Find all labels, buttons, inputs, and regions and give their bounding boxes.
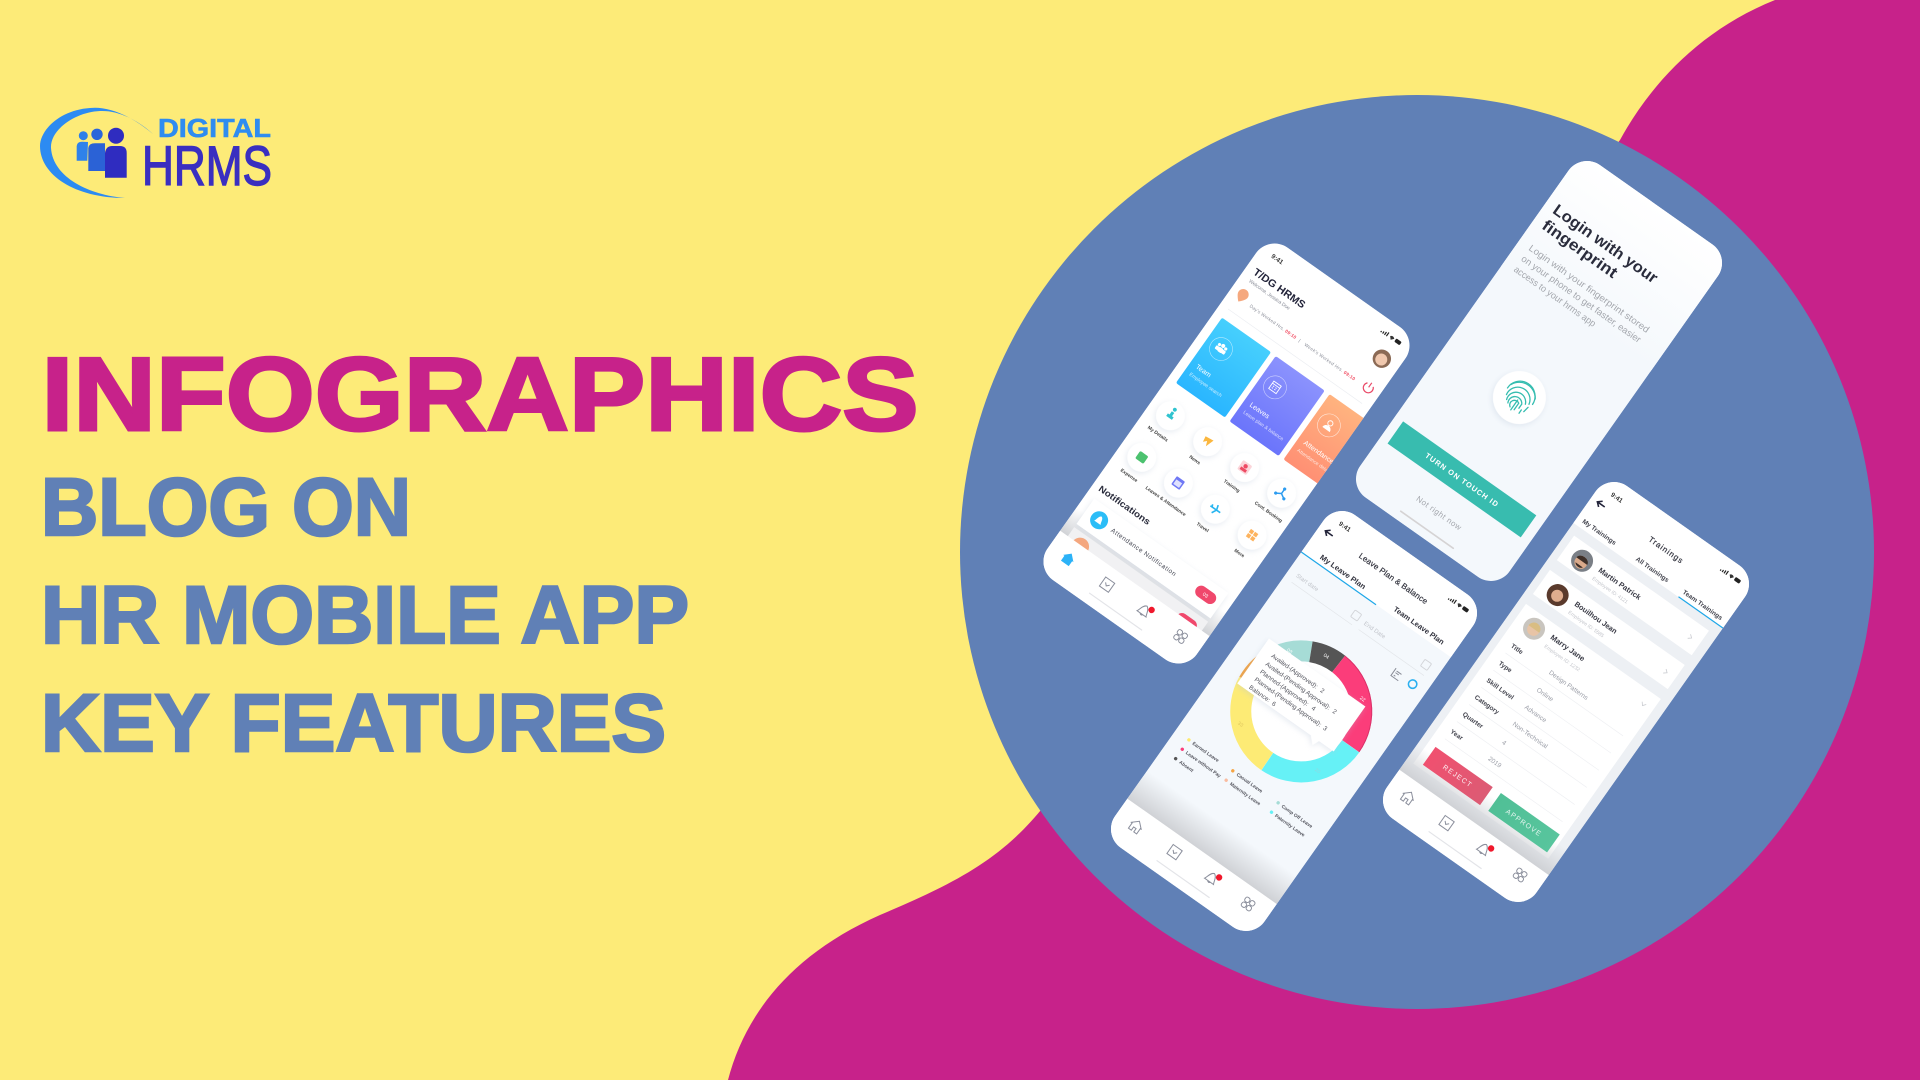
status bar xyxy=(1270,252,1402,349)
headline: INFOGRAPHICS: INFOGRAPHICS xyxy=(42,337,918,453)
app title: T/DG HRMS xyxy=(1251,266,1308,311)
location pin icon xyxy=(1238,289,1249,302)
donut tooltip xyxy=(1233,638,1365,757)
menu: Expense xyxy=(1120,448,1155,482)
donut tooltip: 2 xyxy=(1331,708,1338,716)
donut tooltip: 2 xyxy=(1319,687,1326,695)
screen title: Trainings xyxy=(1647,535,1685,565)
list card: Bouilhou Jean xyxy=(1533,570,1685,689)
bottom nav xyxy=(1044,530,1210,664)
tab: Team Trainings: Team Trainings xyxy=(1681,589,1724,622)
legend: Leave without Pay xyxy=(1184,750,1222,779)
detail form rows: Non-Technical xyxy=(1511,721,1549,751)
card: Leaves: Leave plan & balance xyxy=(1242,410,1285,442)
Turn on Touch ID button: TURN ON TOUCH ID xyxy=(1423,451,1501,509)
date fields: Start date xyxy=(1294,573,1320,594)
login description: on your phone to get faster, easier xyxy=(1519,253,1643,345)
notification shade xyxy=(1060,507,1226,637)
donut chart xyxy=(1230,640,1372,782)
tab: My Leave Plan: My Leave Plan xyxy=(1318,553,1368,591)
APPROVE button xyxy=(1488,793,1560,852)
list card: Bouilhou Jean: Employee ID: 5585 xyxy=(1567,610,1605,639)
tab: Team Leave Plan: Team Leave Plan xyxy=(1392,605,1446,647)
donut tooltip: Planned-(Pending Approval): xyxy=(1253,676,1323,729)
donut tooltip: 3 xyxy=(1321,725,1329,733)
logo people icon xyxy=(77,128,127,178)
notification card: 03 xyxy=(1201,592,1209,600)
detail form rows: 2019 xyxy=(1487,756,1503,770)
detail form rows: Category xyxy=(1473,694,1500,716)
phone: dashboard screen xyxy=(1044,244,1410,664)
chart toggle icons xyxy=(1391,668,1418,691)
donut chart: 22 xyxy=(1358,695,1367,704)
menu: More: More xyxy=(1233,548,1246,560)
legend: Casual Leave xyxy=(1235,772,1264,795)
card: Attendance xyxy=(1284,394,1364,484)
phone: leave plan screen xyxy=(1101,502,1486,941)
legend: Absent xyxy=(1178,760,1195,774)
card: Team: Employee search xyxy=(1188,372,1223,399)
detail form rows: Quarter xyxy=(1461,711,1485,731)
login heading: fingerprint xyxy=(1539,217,1621,282)
home indicator xyxy=(1400,510,1454,549)
menu: Training: Training xyxy=(1222,479,1241,494)
APPROVE button: APPROVE xyxy=(1504,808,1543,839)
donut tooltip: Planned-(Approved): xyxy=(1258,669,1310,708)
menu: More xyxy=(1234,526,1266,558)
menu: Travel xyxy=(1197,500,1228,532)
menu: Expense: Expense xyxy=(1119,468,1139,484)
subheading: BLOG ON: BLOG ON xyxy=(41,462,411,553)
avatar xyxy=(1372,350,1392,368)
detail form rows: Design Patterns xyxy=(1547,669,1590,702)
status bar xyxy=(1609,490,1742,587)
screen title: Leave Plan & Balance xyxy=(1357,551,1430,606)
legend xyxy=(1172,737,1314,849)
status bar: 9:41 xyxy=(1270,253,1285,266)
list card: Martin Patrick: Employee ID: 4121 xyxy=(1591,576,1629,605)
logo word HRMS: HRMS xyxy=(142,134,272,197)
list card: Martin Patrick xyxy=(1557,536,1709,655)
background: blue circle xyxy=(960,95,1874,1009)
tab: My Trainings: My Trainings xyxy=(1581,518,1618,547)
menu: Cont. Booking: Cont. Booking xyxy=(1253,500,1283,524)
card: Team: Team xyxy=(1194,364,1212,379)
phone: trainings screen xyxy=(1373,473,1758,912)
list card: Martin Patrick: Martin Patrick xyxy=(1597,566,1643,602)
menu: Travel: Travel xyxy=(1195,521,1210,534)
logo word DIGITAL: DIGITAL xyxy=(158,113,271,143)
legend: Paternity Leave xyxy=(1273,813,1306,839)
not right now link: Not right now xyxy=(1414,494,1463,532)
login description: access to your hrms app xyxy=(1512,263,1598,329)
donut tooltip: Availed-(Approved): xyxy=(1270,653,1319,691)
menu: News: News xyxy=(1188,454,1202,467)
notifications heading: Notifications xyxy=(1097,484,1152,527)
REJECT button: REJECT xyxy=(1441,764,1473,790)
card: Leaves xyxy=(1230,356,1325,456)
bottom nav xyxy=(1101,799,1277,941)
nav shade xyxy=(1127,770,1297,904)
list card: Bouilhou Jean: Bouilhou Jean xyxy=(1573,600,1619,636)
next notification peek xyxy=(1068,527,1208,630)
logo: Digital HRMS xyxy=(40,108,272,198)
donut tooltip: Balance: xyxy=(1247,684,1272,704)
notification card xyxy=(1076,499,1228,618)
menu: News xyxy=(1189,433,1220,464)
detail form rows: Skill Level xyxy=(1485,677,1515,702)
background: magenta blob xyxy=(728,0,1920,1080)
back arrow xyxy=(1324,530,1334,537)
donut chart: 04 xyxy=(1322,653,1330,661)
detail form rows xyxy=(1445,642,1631,822)
login description: Login with your fingerprint stored xyxy=(1527,242,1652,335)
detail form rows: Type xyxy=(1497,660,1513,675)
detail card: Marry Jane: Employee ID: 1232 xyxy=(1543,644,1581,673)
notification card: Attendance Notification xyxy=(1109,527,1177,578)
phone: fingerprint login screen xyxy=(1347,152,1731,590)
card: Attendance: Attendance details xyxy=(1296,448,1333,477)
menu: Leaves & Attendance: Leaves & Attendance xyxy=(1144,485,1187,518)
legend: Comp Off Leave xyxy=(1280,804,1314,830)
detail form rows: Year xyxy=(1449,728,1464,742)
worked hours xyxy=(1249,304,1356,382)
REJECT button xyxy=(1423,747,1493,805)
worked hours: Day's Worked Hrs. 09:10 xyxy=(1249,304,1298,340)
menu: My Details xyxy=(1148,406,1184,442)
worked hours: Week's Worked Hrs. 09:10 xyxy=(1303,342,1356,382)
detail form rows: 4 xyxy=(1500,739,1508,747)
date fields xyxy=(1292,571,1432,676)
card: Leaves: Leaves xyxy=(1248,402,1271,421)
fingerprint icon xyxy=(1491,372,1546,426)
donut chart: 33 xyxy=(1236,721,1244,729)
detail form rows: Title xyxy=(1509,643,1524,656)
status bar: 9:41 xyxy=(1337,521,1352,534)
power icon xyxy=(1362,382,1374,394)
Turn on Touch ID button xyxy=(1388,421,1536,537)
status bar xyxy=(1337,519,1470,616)
card: Attendance: Attendance xyxy=(1302,440,1335,466)
donut tooltip: 6 xyxy=(1270,700,1278,708)
back arrow xyxy=(1595,499,1607,510)
legend: Maternity Leave xyxy=(1228,781,1262,807)
menu: My Details: My Details xyxy=(1146,425,1169,444)
menu: Leaves & Attendance xyxy=(1145,474,1191,516)
detail card: Marry Jane xyxy=(1413,604,1661,859)
tab: All Trainings: All Trainings xyxy=(1634,556,1670,584)
detail form rows: Advance xyxy=(1523,704,1548,725)
welcome line: Welcome, Jessica Doe xyxy=(1247,279,1291,312)
bottom nav xyxy=(1373,770,1549,912)
donut tooltip: 4 xyxy=(1310,705,1317,713)
legend: Earned Leave xyxy=(1191,741,1220,764)
donut chart: 03 xyxy=(1285,647,1293,656)
nav shade xyxy=(1399,744,1567,875)
subheading: HR MOBILE APP: HR MOBILE APP xyxy=(41,570,689,661)
donut tooltip: Availed-(Pending Approval): xyxy=(1264,661,1332,712)
subheading: KEY FEATURES: KEY FEATURES xyxy=(41,678,666,769)
donut chart: 20 xyxy=(1313,767,1322,775)
login heading: Login with your xyxy=(1549,202,1661,287)
date fields: End Date xyxy=(1362,621,1387,641)
logo swoosh xyxy=(40,108,153,198)
detail card: Marry Jane: Marry Jane xyxy=(1549,633,1587,663)
card: Team xyxy=(1176,318,1271,418)
status bar: 9:41 xyxy=(1609,492,1624,505)
worked hours: | xyxy=(1298,338,1302,343)
menu: Training xyxy=(1224,458,1258,493)
menu: Cont. Booking xyxy=(1255,484,1295,523)
detail form rows: Online xyxy=(1535,687,1555,704)
